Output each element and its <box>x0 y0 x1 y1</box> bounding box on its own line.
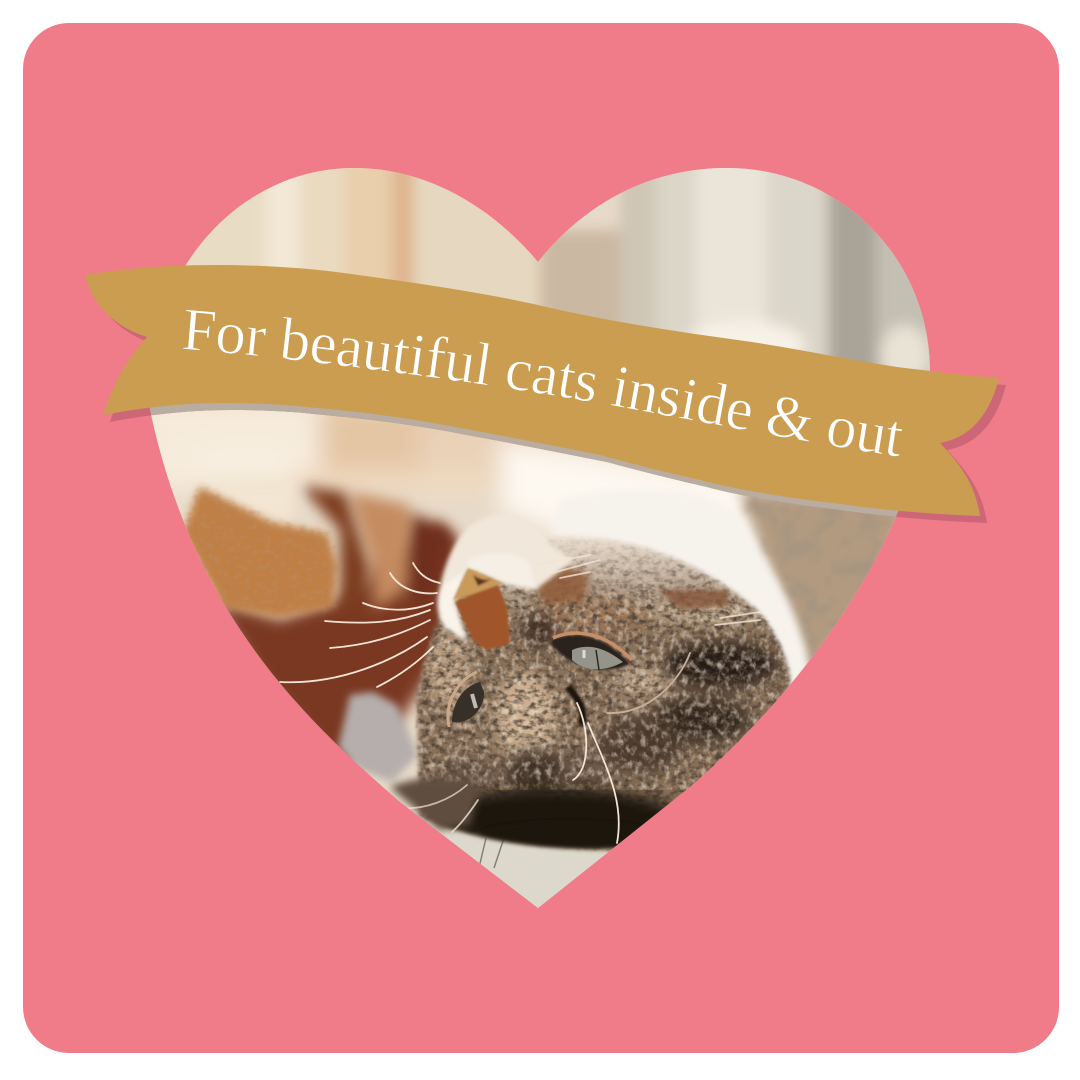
tabby body on the right <box>734 494 896 670</box>
orange cat: stripes <box>242 476 462 615</box>
russet forehead patch <box>533 563 590 605</box>
slogan text: For beautiful cats inside & out <box>183 310 902 456</box>
upper eye <box>552 633 632 670</box>
banner shadow on pink <box>92 272 1006 523</box>
mouth slit <box>568 687 583 725</box>
head tonal patches <box>426 595 778 796</box>
white cushion bottom <box>430 825 618 908</box>
curtain stripes behind the cats <box>186 168 930 371</box>
orange cat: fur patch <box>182 482 340 620</box>
banner shadow on photo <box>150 403 898 517</box>
banner ribbon with slogan <box>85 265 999 516</box>
white ruff around head <box>553 528 812 687</box>
photo: cat in heart-shaped frame <box>140 150 940 920</box>
dark chin <box>433 788 677 848</box>
grey cushion left <box>338 692 418 782</box>
cat head <box>386 534 794 854</box>
nose bridge and nose <box>453 568 510 650</box>
lower eye <box>448 672 484 727</box>
muzzle and forehead white <box>437 513 575 642</box>
orange cat: dark lower belly <box>215 520 470 770</box>
blurred cream area under banner <box>151 410 762 548</box>
lower cheek fur <box>390 778 480 830</box>
whiskers <box>280 555 760 843</box>
russet brow patch <box>660 590 730 610</box>
